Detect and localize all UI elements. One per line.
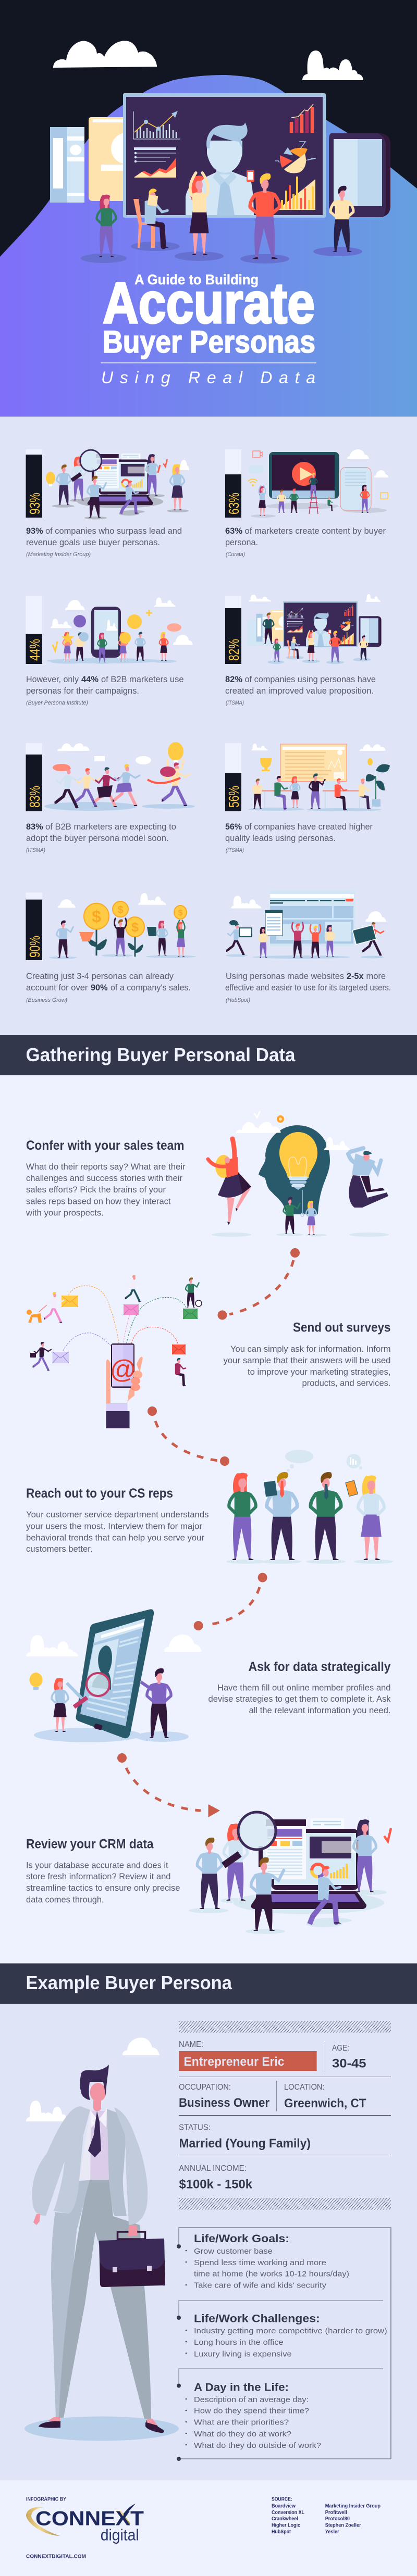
stat text xyxy=(225,526,386,558)
step text: Ask for data strategically xyxy=(248,1660,391,1674)
life and work goals xyxy=(186,2233,349,2290)
stat text: revenue goals use buyer personas. xyxy=(26,537,160,547)
sources: HubSpot xyxy=(272,2529,291,2535)
stat text: created an improved value proposition. xyxy=(225,686,374,696)
stat panel: 93% xyxy=(26,449,189,558)
stat text: of companies who surpass lead and xyxy=(45,526,182,536)
occupation field xyxy=(179,2083,269,2110)
progress bar 44%: 44% xyxy=(27,639,43,661)
persona profile card xyxy=(179,2021,391,2210)
step text: What do their reports say? What are their xyxy=(26,1162,186,1172)
step: confer with your sales team xyxy=(26,1111,389,1237)
progress bar 90%: 90% xyxy=(27,936,43,958)
stat text: (Business Grow) xyxy=(26,997,67,1003)
illustration: laptop and magnifier team xyxy=(189,1812,391,1934)
stat text: (ITSMA) xyxy=(26,847,45,853)
step text: Is your database accurate and does it xyxy=(26,1860,168,1870)
sources: Stephen Zoeller xyxy=(325,2522,361,2529)
sources: Protocol80 xyxy=(325,2516,350,2522)
stat panel: 83% xyxy=(26,742,195,853)
section header: gathering data xyxy=(0,1035,417,1075)
stat panel: 63% xyxy=(225,449,388,558)
title block xyxy=(101,271,316,387)
website: CONNEXTDIGITAL.COM xyxy=(26,2554,86,2560)
step text: with your prospects. xyxy=(26,1208,104,1217)
stat text: 82% xyxy=(225,674,242,684)
location field xyxy=(284,2083,366,2110)
stat text xyxy=(225,971,391,1003)
status field: Married (Young Family) xyxy=(179,2137,311,2151)
step text: sales reps based on how they interact xyxy=(26,1197,171,1206)
life and work challenges xyxy=(186,2313,387,2359)
step text xyxy=(223,1321,391,1388)
life and work goals: Take care of wife and kids' security xyxy=(194,2281,327,2290)
illustration: money growth xyxy=(49,893,196,959)
sources: Marketing Insider Group xyxy=(325,2504,381,2509)
step text: store fresh information? Review it and xyxy=(26,1871,171,1881)
illustration: race to the idea xyxy=(44,742,195,811)
section header: example persona: Example Buyer Persona xyxy=(26,1972,232,1993)
sources: Boardview xyxy=(272,2504,296,2509)
hero hill xyxy=(0,75,417,417)
illustration: money growth: $ xyxy=(131,920,139,935)
illustration: video screen xyxy=(248,449,388,518)
progress bar 90% xyxy=(26,893,43,960)
section header: example persona xyxy=(0,1963,417,2004)
occupation field: Business Owner xyxy=(179,2096,269,2110)
a day in the life: What do they do outside of work? xyxy=(194,2441,321,2450)
stat text: However, only xyxy=(26,674,79,684)
life and work goals: Grow customer base xyxy=(194,2247,273,2256)
step text: your sample that their answers will be used xyxy=(223,1355,391,1365)
stat text: 2-5x xyxy=(347,971,364,981)
annual income field: ANNUAL INCOME: xyxy=(179,2164,247,2173)
step text: streamline tactics to ensure only precise xyxy=(26,1883,180,1893)
step text: challenges and success stories with their xyxy=(26,1173,182,1183)
step text: Review your CRM data xyxy=(26,1837,154,1852)
sources xyxy=(272,2496,381,2535)
stat text: persona. xyxy=(225,537,258,547)
step: ask for data strategically xyxy=(26,1609,391,1742)
step text xyxy=(208,1660,391,1715)
stat text: 93% xyxy=(26,526,43,536)
a day in the life: What do they do at work? xyxy=(194,2430,291,2439)
stat text: (Curata) xyxy=(226,551,245,558)
step text: Confer with your sales team xyxy=(26,1138,185,1153)
status field xyxy=(179,2123,311,2151)
a day in the life: What are their priorities? xyxy=(194,2418,289,2427)
sources: Profitwell xyxy=(325,2510,347,2516)
life and work goals: Life/Work Goals: xyxy=(194,2233,289,2245)
step: send out surveys xyxy=(27,1275,391,1428)
life and work goals: Spend less time working and more xyxy=(194,2258,326,2267)
cloud left xyxy=(53,41,157,68)
step: reach out to your CS reps xyxy=(26,1450,394,1564)
progress bar 44% xyxy=(26,596,43,664)
stat panel: 56% xyxy=(225,743,390,853)
life and work challenges: Luxury living is expensive xyxy=(194,2349,292,2359)
progress bar 83%: 83% xyxy=(27,786,43,808)
life and work goals: time at home (he works 10-12 hours/day) xyxy=(194,2269,349,2279)
stat text xyxy=(26,822,176,853)
logo: Connext Digital: CONNEXT xyxy=(35,2508,144,2530)
status field: STATUS: xyxy=(179,2123,211,2132)
stat text: (Buyer Persona Institute) xyxy=(26,700,88,706)
arrow: step 4 to 5 xyxy=(117,1753,220,1817)
step text xyxy=(26,1837,180,1905)
step text: sales efforts? Pick the brains of your xyxy=(26,1185,166,1195)
step text: all the relevant information you need. xyxy=(249,1705,391,1715)
footer xyxy=(0,2480,417,2576)
step: review your CRM data xyxy=(26,1812,391,1934)
progress bar 56%: 56% xyxy=(226,786,242,808)
a day in the life: How do they spend their time? xyxy=(194,2407,309,2415)
a day in the life xyxy=(186,2382,321,2450)
age field: 30-45 xyxy=(332,2057,366,2070)
illustration: phone sending emails xyxy=(27,1275,202,1428)
stat text: 83% xyxy=(26,822,43,832)
name field: NAME: xyxy=(179,2040,203,2049)
life and work challenges: Long hours in the office xyxy=(194,2338,284,2347)
stat text: quality leads using personas. xyxy=(225,833,336,843)
logo: Connext Digital xyxy=(26,2504,144,2544)
progress bar 63%: 63% xyxy=(226,493,242,514)
illustration: website wireframe xyxy=(226,890,386,959)
stat text: 63% xyxy=(225,526,242,536)
stat text: more xyxy=(366,971,386,981)
step text: Have them fill out online member profiles and xyxy=(217,1683,391,1692)
a day in the life: A Day in the Life: xyxy=(194,2382,289,2393)
stat text: of B2B marketers use xyxy=(101,674,183,684)
stat text: (ITSMA) xyxy=(226,847,244,853)
stat text: of marketers create content by buyer xyxy=(245,526,386,536)
illustration: money growth: $ xyxy=(117,904,124,916)
progress bar 82% xyxy=(225,596,242,664)
location field: LOCATION: xyxy=(284,2083,324,2092)
stat text xyxy=(26,674,183,706)
stat panel: 44% xyxy=(26,596,193,706)
stat text xyxy=(26,971,191,1003)
name field xyxy=(179,2040,317,2071)
location field: Greenwich, CT xyxy=(284,2096,366,2110)
illustration: money growth: $ xyxy=(92,907,101,926)
stat text: of a company's sales. xyxy=(111,983,191,992)
stat text: (Marketing Insider Group) xyxy=(26,551,91,558)
illustration: persona man with briefcase xyxy=(24,2038,179,2441)
stat text: effective and easier to use for its targeted users. xyxy=(225,983,391,992)
stat panel: 82% xyxy=(225,594,382,706)
stat text: (ITSMA) xyxy=(226,700,244,706)
age field: AGE: xyxy=(332,2044,349,2053)
progress bar 83% xyxy=(26,743,43,811)
annual income field: $100k - 150k xyxy=(179,2178,253,2191)
step text: behavioral trends that can help you serve your xyxy=(26,1533,204,1542)
stat text: Using personas made websites xyxy=(226,971,344,981)
stat text: 44% xyxy=(81,674,99,684)
illustration: office meeting xyxy=(248,744,390,811)
step text: devise strategies to get them to complete it. Ask xyxy=(208,1694,391,1704)
stat text: 56% xyxy=(225,822,242,832)
sources: Conversion XL xyxy=(272,2510,304,2516)
stat text: account for over xyxy=(26,983,88,992)
sources: Yesler xyxy=(325,2529,339,2535)
stat text: of companies using personas have xyxy=(245,674,376,684)
stats section background xyxy=(0,417,417,1035)
step text: Send out surveys xyxy=(293,1321,391,1335)
illustration: tablet profile xyxy=(26,1609,202,1742)
age field xyxy=(332,2044,366,2070)
illustration: persona presentation xyxy=(247,594,382,664)
illustration: phone and people xyxy=(47,598,193,664)
sources: Higher Logic xyxy=(272,2522,300,2529)
stat panel: 2-5x xyxy=(225,890,391,1003)
annual income field xyxy=(179,2164,253,2191)
top hatch bar xyxy=(179,2021,391,2033)
step text: products, and services. xyxy=(302,1378,391,1388)
title block: Using Real Data xyxy=(101,368,315,387)
illustration: customer service team xyxy=(226,1450,394,1564)
arrow: step 3 to 4 xyxy=(194,1573,267,1630)
step text: your users the most. Interview them for major xyxy=(26,1522,202,1531)
stat text: of companies have created higher xyxy=(244,822,373,832)
stat text: Creating just 3-4 personas can already xyxy=(26,971,174,981)
step text: Reach out to your CS reps xyxy=(26,1486,173,1501)
hero scene: monitor, books, tablet and people xyxy=(50,93,390,263)
step text: You can simply ask for information. Inform xyxy=(230,1344,391,1354)
occupation field: OCCUPATION: xyxy=(179,2083,231,2092)
illustration: money growth: $ xyxy=(178,909,183,918)
progress bar 93%: 93% xyxy=(27,493,43,514)
step text: to improve your marketing strategies, xyxy=(248,1367,391,1377)
stat text xyxy=(225,822,373,853)
arrow: step 2 to 3 xyxy=(148,1406,229,1466)
illustration: idea head with jumping people xyxy=(208,1111,389,1237)
arrow: step 1 to 2 xyxy=(218,1248,300,1320)
life and work challenges: Industry getting more competitive (harder to grow) xyxy=(194,2327,387,2335)
title block: Buyer Personas xyxy=(103,324,315,359)
hero banner xyxy=(0,0,417,417)
illustration: laptop review xyxy=(46,450,189,519)
stat text: adopt the buyer persona model soon. xyxy=(26,833,169,843)
stat panel: 90% xyxy=(26,893,196,1003)
stat text: of B2B marketers are expecting to xyxy=(45,822,176,832)
title block: Accurate xyxy=(103,271,315,335)
sources: SOURCE: xyxy=(272,2496,292,2503)
section header: gathering data: Gathering Buyer Personal Data xyxy=(26,1044,296,1065)
sources: Crankwheel xyxy=(272,2516,298,2522)
lower hatch bar xyxy=(179,2198,391,2210)
life and work challenges: Life/Work Challenges: xyxy=(194,2313,320,2324)
infographic by label: INFOGRAPHIC BY xyxy=(26,2496,66,2503)
step text xyxy=(26,1486,208,1554)
a day in the life: Description of an average day: xyxy=(194,2395,309,2404)
step text: data comes through. xyxy=(26,1894,104,1905)
progress bar 82%: 82% xyxy=(226,639,242,661)
progress bar 56% xyxy=(225,743,242,811)
logo: Connext Digital: digital xyxy=(101,2525,139,2544)
step text xyxy=(26,1138,186,1217)
progress bar 63% xyxy=(225,449,242,518)
stat text xyxy=(225,674,376,706)
persona section background xyxy=(0,2004,417,2480)
stat text: personas for their campaigns. xyxy=(26,686,139,696)
stat text: 90% xyxy=(91,983,108,992)
name field: Entrepreneur Eric xyxy=(183,2055,285,2069)
cloud right xyxy=(302,51,363,80)
step text: Your customer service department understands xyxy=(26,1510,208,1519)
details box xyxy=(177,2228,391,2461)
illustration: phone sending emails: @ xyxy=(110,1355,136,1384)
title block: A Guide to Building xyxy=(134,272,259,287)
progress bar 93% xyxy=(26,449,43,518)
stat text xyxy=(26,526,182,558)
step text: customers better. xyxy=(26,1544,93,1554)
stat text: (HubSpot) xyxy=(226,997,250,1003)
